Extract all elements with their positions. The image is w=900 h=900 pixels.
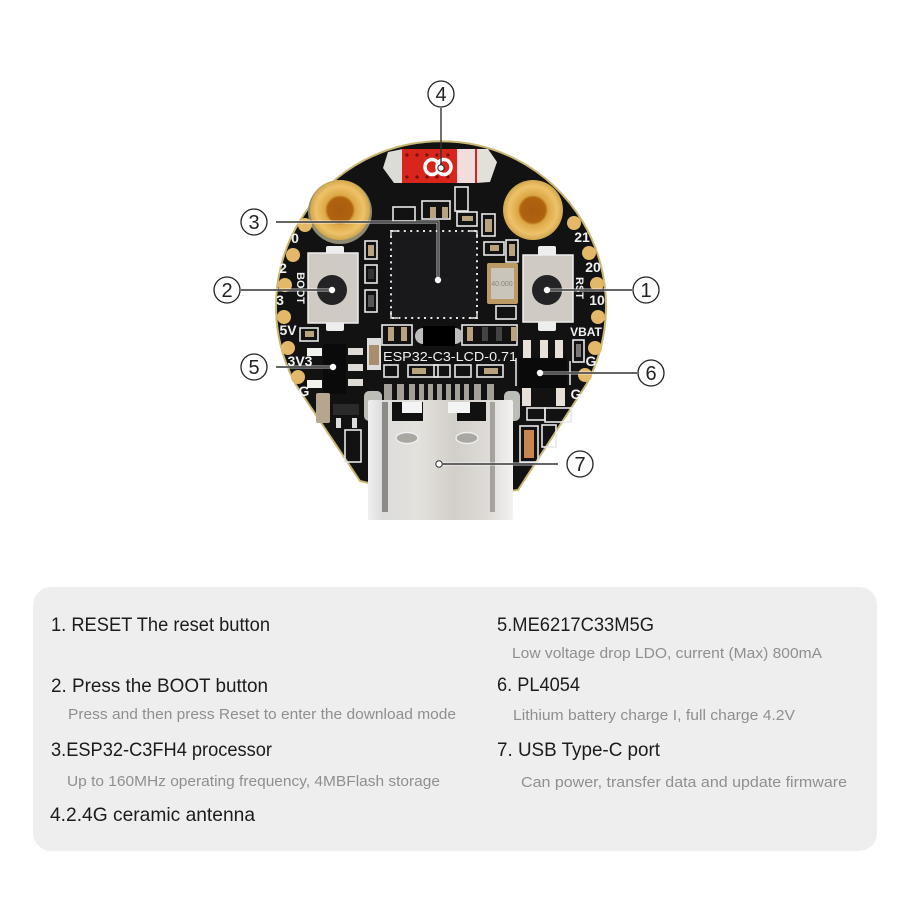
mounting holes	[308, 180, 563, 244]
item 7: Can power, transfer data and update firmware	[521, 774, 847, 791]
buttons	[308, 246, 573, 331]
item 6	[497, 674, 795, 724]
item 7: 7. USB Type-C port	[497, 739, 661, 761]
callout 7: USB port	[436, 451, 593, 477]
silkscreen labels: VBAT	[570, 325, 603, 339]
silkscreen labels: 3	[276, 292, 284, 308]
callout 4: antenna: 4	[435, 84, 447, 106]
item 7	[497, 739, 847, 791]
callout 5: LDO: 5	[248, 357, 260, 379]
silkscreen labels: RST	[573, 277, 585, 299]
edge pads	[277, 216, 605, 384]
callout 7: USB port: 7	[574, 454, 586, 476]
item 5: Low voltage drop LDO, current (Max) 800mA	[512, 645, 822, 662]
callout 6: charger	[537, 360, 664, 386]
silkscreen labels: 3V3	[288, 353, 313, 369]
item 3	[51, 739, 440, 790]
description panel	[33, 587, 877, 851]
item 6: Lithium battery charge I, full charge 4.2V	[513, 707, 795, 724]
silkscreen labels: G	[571, 386, 582, 402]
item 5	[497, 614, 822, 662]
callout 1: reset button: 1	[640, 280, 652, 302]
callout 5: LDO	[241, 354, 336, 380]
item 3: Up to 160MHz operating frequency, 4MBFlash storage	[67, 773, 440, 790]
USB Type-C port	[364, 391, 520, 520]
item 6: 6. PL4054	[497, 674, 580, 696]
ceramic antenna	[383, 149, 497, 183]
silkscreen labels: 0	[291, 230, 299, 246]
USB connector pins	[384, 384, 494, 404]
item 2: Press and then press Reset to enter the download mode	[68, 706, 456, 723]
item 5: 5.ME6217C33M5G	[497, 614, 654, 636]
board outline	[276, 141, 606, 500]
silkscreen labels	[276, 229, 605, 402]
silkscreen labels: 20	[585, 259, 601, 275]
crystal	[487, 263, 518, 304]
product board photo	[276, 141, 606, 520]
callout 6: charger: 6	[645, 363, 657, 385]
silkscreen labels: 5V	[279, 322, 297, 338]
silkscreen labels: 21	[574, 229, 590, 245]
callout 3: processor	[241, 209, 441, 283]
silkscreen labels: G	[299, 383, 310, 399]
silkscreen labels: ESP32-C3-LCD-0.71	[383, 349, 517, 364]
silkscreen labels: BOOT	[294, 272, 306, 304]
item 4: 4.2.4G ceramic antenna	[50, 804, 255, 826]
item 3: 3.ESP32-C3FH4 processor	[51, 739, 272, 761]
callout 4: antenna	[428, 81, 454, 171]
crystal: 40.000	[491, 281, 513, 288]
item 1: 1. RESET The reset button	[51, 614, 270, 636]
item 2	[51, 675, 456, 723]
callout 3: processor: 3	[248, 212, 260, 234]
callout 2: boot button	[214, 277, 335, 303]
silkscreen labels: 2	[279, 260, 287, 276]
processor chip	[391, 231, 477, 318]
callout 2: boot button: 2	[221, 280, 233, 302]
silkscreen labels: G	[586, 353, 597, 369]
small silk components	[300, 187, 584, 462]
callout 1: reset button	[544, 277, 659, 303]
item 2: 2. Press the BOOT button	[51, 675, 268, 697]
silkscreen labels: 10	[589, 292, 605, 308]
